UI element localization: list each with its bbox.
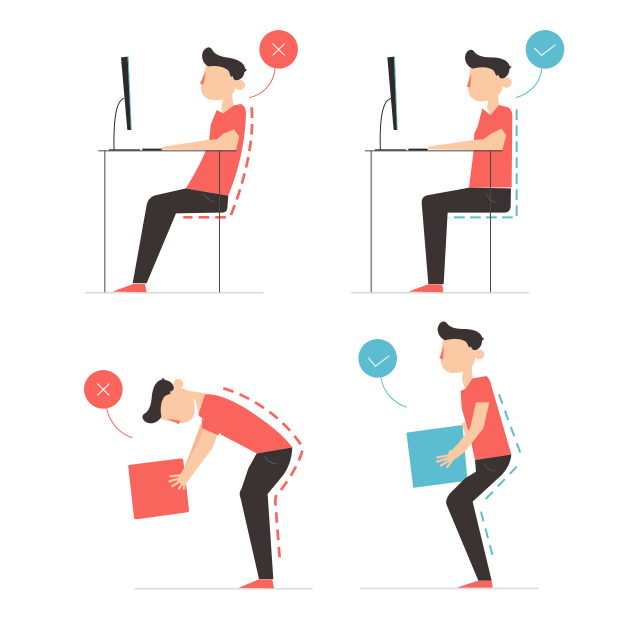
speech bubble: correct [358, 339, 407, 407]
box [128, 458, 189, 519]
speech bubble: wrong [84, 370, 132, 438]
scene: good sitting posture [351, 30, 564, 294]
person sitting slouched [112, 47, 250, 292]
person sitting upright [408, 50, 512, 292]
ground line [360, 588, 538, 589]
desk [365, 150, 502, 292]
ground line [134, 588, 313, 590]
ground line [85, 292, 263, 294]
hand and fingers [170, 475, 185, 489]
monitor [375, 57, 406, 150]
desk [98, 150, 237, 292]
person bending over [128, 376, 292, 588]
chair dashed outline [448, 109, 517, 217]
monitor [109, 57, 140, 150]
scene: bad sitting posture [85, 30, 298, 294]
ground line [351, 292, 529, 294]
back and leg dashed outline [223, 388, 303, 562]
person squatting with box [407, 321, 511, 588]
illustration [84, 30, 564, 590]
chair dashed outline [183, 107, 252, 217]
scene: bad lifting posture [84, 370, 313, 590]
speech bubble: wrong [249, 30, 298, 98]
speech bubble: correct [516, 30, 564, 98]
scene: good lifting posture [358, 321, 538, 589]
back and leg dashed outline [481, 394, 522, 558]
box [407, 426, 467, 487]
hand and fingers [437, 451, 452, 467]
